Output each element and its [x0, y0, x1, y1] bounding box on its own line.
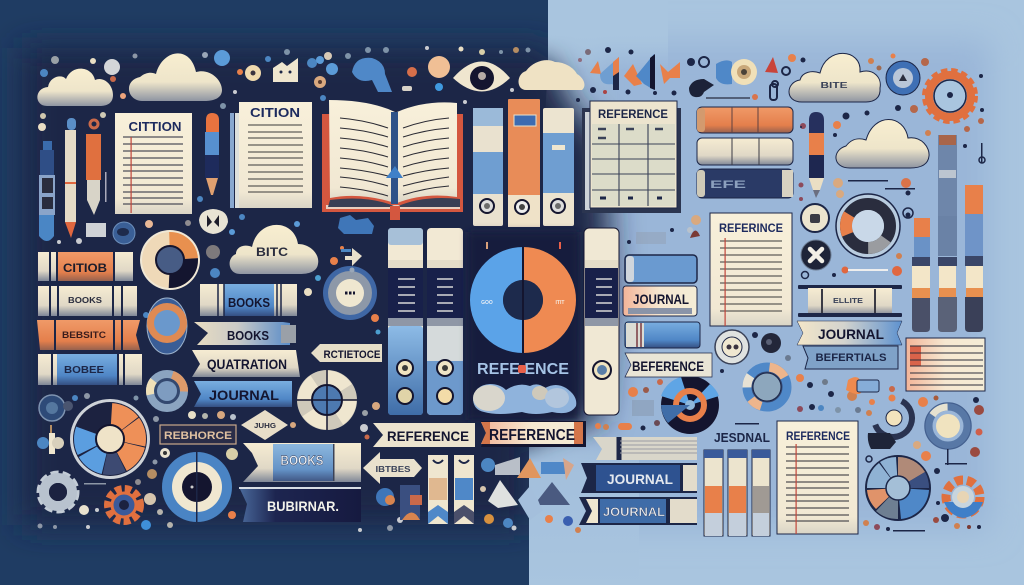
book stack: orange: BEBSITC — [62, 330, 107, 340]
reference table document — [582, 101, 681, 213]
beference ribbon — [625, 353, 712, 377]
dark donut chart center right — [661, 376, 719, 434]
pie chart lower right — [865, 455, 931, 521]
document: citation open journal — [230, 102, 312, 208]
rebhorce label — [160, 425, 236, 444]
small arrow tile — [340, 246, 362, 266]
eye icon — [453, 62, 510, 92]
juhg diamond — [241, 410, 288, 440]
puzzle cluster — [376, 485, 422, 520]
orange gear left — [108, 489, 140, 521]
central split donut chart: GOO — [481, 300, 493, 306]
cloud 3 — [518, 60, 584, 90]
journal banner right: JOURNAL — [818, 326, 884, 342]
cloud 4 — [836, 120, 929, 168]
journal cream tile: JOURNAL — [633, 291, 689, 307]
central split donut chart — [470, 247, 576, 353]
reference ribbon cream — [373, 423, 475, 447]
grey gear — [41, 475, 75, 509]
beference ribbon: BEFERENCE — [632, 358, 704, 374]
scattered dots, right area — [545, 47, 985, 533]
sheet with red rows — [906, 338, 985, 391]
book stack: blue — [38, 354, 142, 385]
jesdnal heading: JESDNAL — [714, 430, 770, 445]
arrow tile label ibtbes: IBTBES — [376, 464, 411, 474]
bookmark strip 2 — [454, 455, 474, 524]
document: reference right lower — [777, 421, 858, 534]
juhg diamond: JUHG — [254, 423, 277, 430]
puzzle piece icon — [37, 425, 64, 454]
journal ribbon — [194, 381, 292, 407]
dark disc icon — [761, 333, 781, 353]
orange and blue gear lower right — [944, 480, 983, 518]
pen 3 — [86, 120, 106, 237]
binder 3 — [543, 108, 574, 226]
small badge icon — [113, 222, 135, 244]
books ribbon — [194, 322, 296, 345]
small dial — [39, 395, 73, 421]
reference heading in center: REFE ENCE — [477, 361, 569, 378]
central split donut chart: ITIT — [556, 300, 564, 306]
book stack: citios — [38, 252, 133, 281]
small device icons top right — [689, 57, 778, 100]
triangular arrow shapes — [590, 54, 680, 90]
ring chart left — [147, 298, 187, 354]
retietoce tag: RCTIETOCE — [324, 349, 380, 361]
document: citation with margin line — [115, 113, 192, 214]
ring chart with stem — [925, 403, 971, 465]
ring chart right middle — [743, 363, 791, 411]
striped blue book — [625, 322, 700, 348]
book stack: cream — [38, 286, 137, 316]
reference ribbon orange — [481, 421, 586, 447]
cloud pile in center — [473, 384, 576, 414]
fountain pen — [205, 113, 219, 195]
open book — [322, 100, 463, 220]
column bars — [912, 135, 983, 332]
books large banner: BOOKS — [280, 452, 324, 468]
book stack: blue: BOBEE — [64, 365, 104, 376]
book stack: orange — [37, 320, 140, 350]
pen 1 — [39, 141, 55, 241]
books large banner — [243, 443, 361, 482]
blue circle icon — [886, 61, 920, 95]
binder column right — [584, 228, 619, 415]
small mask icon — [199, 209, 228, 234]
triangles and arrow cluster — [481, 457, 574, 520]
donut chart left top — [140, 230, 200, 290]
tool ring icon — [868, 394, 917, 449]
reference table document: REFERENCE — [598, 107, 668, 121]
quatration ribbon — [192, 350, 300, 377]
three card strips — [704, 450, 770, 536]
beferences banner right: BEFERTIALS — [816, 352, 886, 364]
blue hexagon cluster — [338, 215, 374, 272]
cloud with bite label: BITC — [256, 245, 288, 259]
binder 1 — [473, 108, 503, 226]
blue blob and dots near eye — [345, 53, 450, 92]
stacked cylinders: EFE — [710, 179, 746, 191]
column binder left — [388, 228, 423, 415]
pen 2 — [65, 118, 76, 238]
column binder middle — [427, 228, 463, 415]
books label: BOOKS — [228, 295, 270, 310]
small book label — [798, 285, 902, 317]
document: reference right upper — [710, 213, 792, 326]
books ribbon: BOOKS — [227, 328, 269, 343]
journal book stack 2: JOURNAL — [603, 505, 665, 519]
journal ribbon: JOURNAL — [209, 387, 279, 403]
bubirnar banner — [239, 487, 361, 522]
journal book stack 2 — [579, 497, 697, 525]
round X icon — [801, 240, 831, 270]
cloud with label — [789, 53, 880, 102]
right target icon — [715, 330, 749, 364]
target circle chart — [162, 452, 232, 522]
journal cream tile — [623, 286, 697, 316]
book stack: pages — [593, 437, 697, 460]
target dial — [323, 266, 377, 320]
beferences banner right — [803, 346, 898, 369]
rebhorce label: REBHORCE — [164, 430, 232, 442]
book stack: citios: CITIOB — [63, 261, 107, 275]
cloud 2 — [129, 53, 222, 101]
scattered dots, left area — [38, 46, 530, 532]
dark center panel — [468, 232, 579, 420]
background: dark left half — [0, 0, 668, 585]
document: reference right upper: REFERINCE — [719, 221, 783, 235]
retietoce tag — [311, 344, 382, 362]
binder 2 — [508, 99, 540, 227]
journal book stack 1 — [581, 463, 697, 493]
large pie chart — [70, 399, 150, 479]
journal banner right — [797, 321, 902, 345]
donut chart left lower — [145, 369, 189, 413]
books label — [200, 284, 297, 316]
book stack: cream: BOOKS — [68, 296, 103, 305]
cloud with bite label — [230, 225, 318, 274]
right pen — [809, 112, 824, 198]
bookmark strip 1 — [428, 455, 448, 524]
reference ribbon orange: REFERENCE — [489, 427, 575, 444]
blue cylinder book — [625, 255, 697, 283]
cloud with label: BITE — [820, 81, 848, 90]
cloud 1 — [37, 69, 113, 106]
donut ring right — [836, 194, 900, 258]
arrow tile label ibtbes — [363, 452, 422, 484]
round badge icon — [801, 204, 829, 232]
reference ribbon cream: REFERENCE — [387, 428, 469, 444]
small book label: ELLITE — [833, 298, 863, 305]
bubirnar banner: BUBIRNAR. — [267, 498, 339, 514]
journal book stack 1: JOURNAL — [607, 472, 673, 487]
stacked cylinders — [697, 107, 793, 198]
document: reference right lower: REFERENCE — [786, 429, 850, 443]
orange gear — [926, 72, 974, 120]
quatration ribbon: QUATRATION — [207, 356, 287, 372]
segmented ring near journal — [297, 370, 357, 430]
jesdnal heading — [714, 423, 770, 445]
house shape — [273, 58, 298, 82]
document: citation open journal: CITION — [250, 105, 300, 120]
document: citation with margin line: CITTION — [128, 119, 182, 134]
